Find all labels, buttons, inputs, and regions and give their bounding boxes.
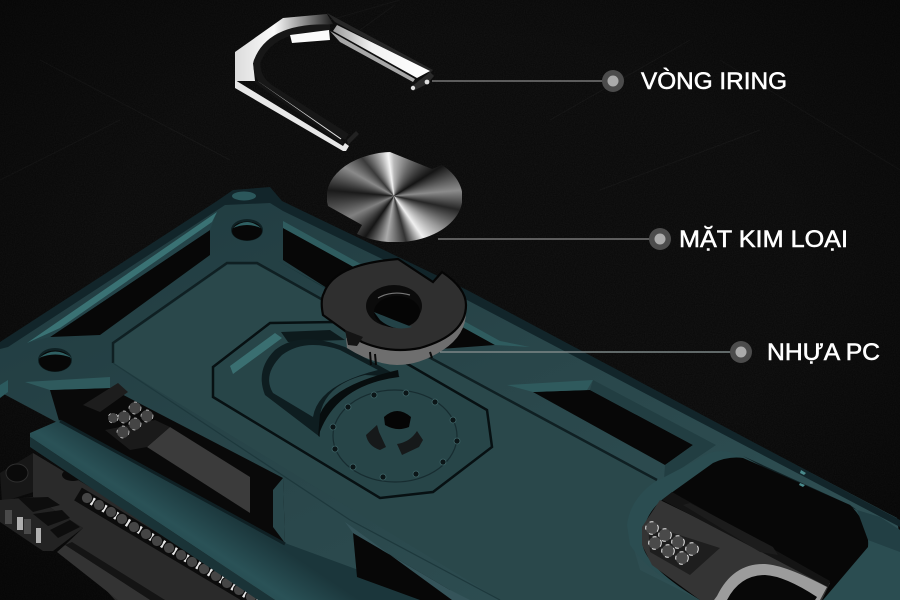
- outer leg side: [235, 80, 349, 151]
- black inner band: [257, 28, 347, 137]
- camera honeycomb: [646, 522, 698, 564]
- callout: Nhựa PC: NHỰA PC: [767, 339, 880, 366]
- camera cutout: [627, 451, 900, 600]
- camera window: [643, 458, 868, 600]
- top face: [235, 14, 333, 81]
- corner bracket: [0, 453, 40, 502]
- side button strip: [78, 492, 262, 600]
- arm inner strip: [330, 31, 415, 82]
- main panel inset: [113, 263, 700, 600]
- window: upper right: [283, 228, 495, 349]
- phone case back: [0, 187, 900, 600]
- button honeycomb: [108, 402, 153, 438]
- part: iRing metal ring: [235, 13, 434, 151]
- arm top strip: [333, 25, 430, 78]
- window: centre right: [533, 390, 693, 465]
- button block: [0, 497, 83, 551]
- rivets: [330, 390, 460, 480]
- phone body below the case: [0, 453, 300, 600]
- callout: Mặt kim loại: MẶT KIM LOẠI: [679, 226, 848, 253]
- ring tips: [347, 131, 359, 145]
- callout: Mặt kim loại: [438, 226, 848, 253]
- callout: Nhựa PC: [440, 339, 880, 366]
- side band: [30, 420, 440, 600]
- window: side button opening: [25, 377, 285, 543]
- outer arm edge: [327, 13, 433, 73]
- centre clips: [366, 411, 423, 455]
- part: PC plastic plate: [322, 259, 466, 365]
- recessed U groove: [262, 339, 400, 437]
- case frame: [0, 189, 900, 600]
- callout: Vòng iRing: VÒNG IRING: [641, 68, 787, 95]
- ring mount octagon: [213, 322, 492, 498]
- callout: Vòng iRing: [432, 68, 787, 95]
- part: metal disc: [327, 152, 462, 242]
- inner white patch: [290, 30, 330, 43]
- window: upper left: [50, 230, 210, 337]
- screw holes: [0, 192, 263, 398]
- window: lower centre: [353, 533, 452, 600]
